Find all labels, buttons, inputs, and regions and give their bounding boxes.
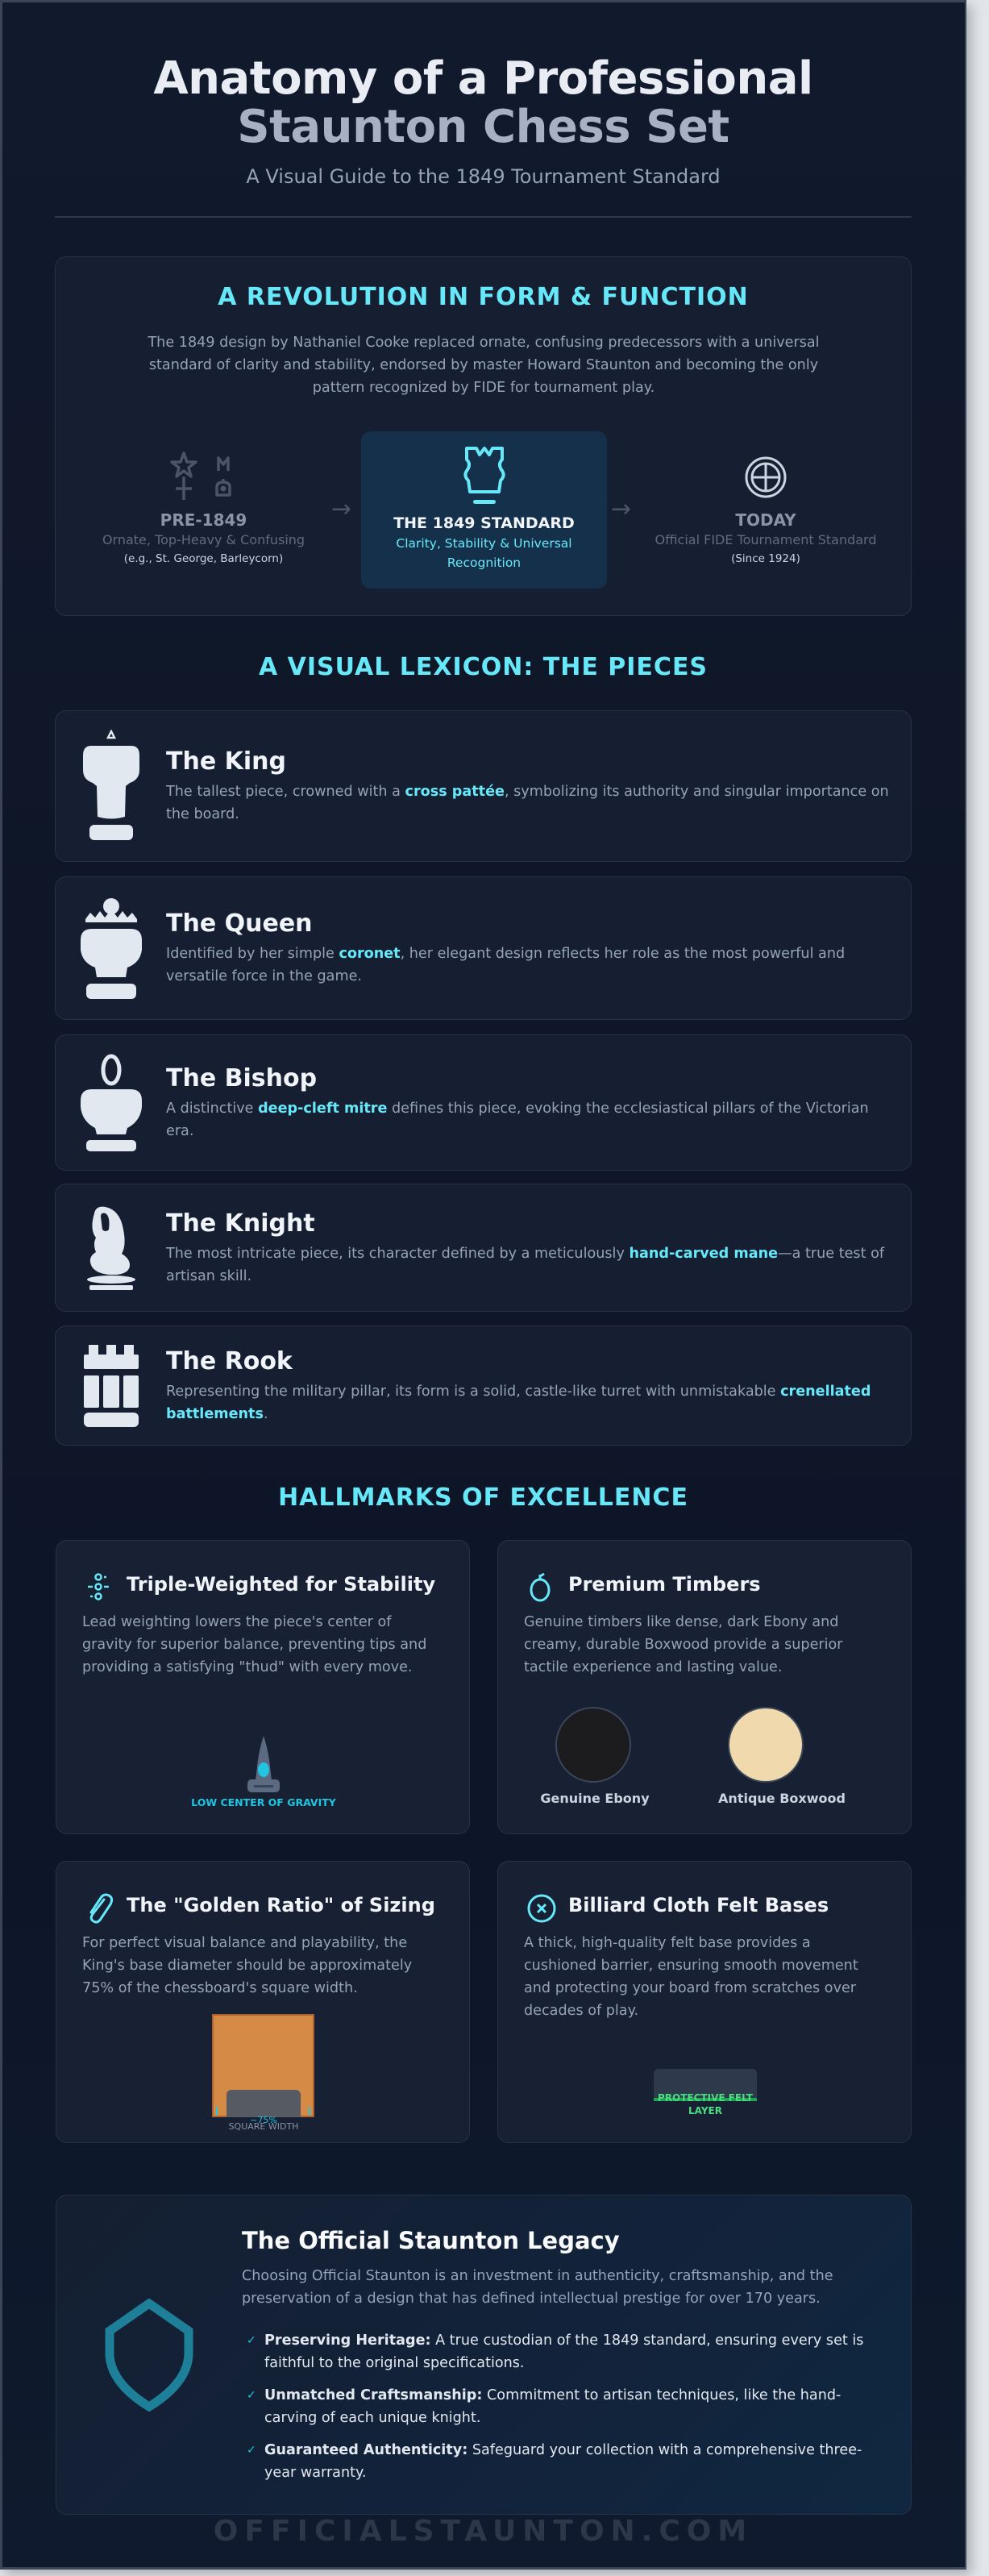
- card: felt bases: Billiard Cloth Felt Bases: [568, 1894, 829, 1916]
- timeline: today: (Since 1924): [731, 552, 800, 565]
- card: triple-weighted: Triple-Weighted for Stability: [127, 1573, 435, 1596]
- label: boxwood: Antique Boxwood: [718, 1791, 846, 1806]
- intro paragraph: The 1849 design by Nathaniel Cooke replaced ornate, confusing predecessors with a universal standard of clarity and stability, endorsed by master Howard Staunton and becoming the only pattern recognized by FIDE for tournament play.: [148, 335, 820, 396]
- icon: shield: [105, 2299, 193, 2412]
- timeline: today: [654, 456, 877, 565]
- subtitle: A Visual Guide to the 1849 Tournament Standard: [246, 165, 721, 188]
- card: queen: Identified by her simple coronet, her elegant design reflects her role as the most powerful and versatile force in the game.: [166, 946, 845, 984]
- graphic: square width: SQUARE WIDTH: [229, 2121, 298, 2132]
- panel: revolution: [55, 256, 912, 616]
- timeline: 1849 standard: THE 1849 STANDARD: [393, 514, 575, 532]
- icon: bishop: [81, 1055, 142, 1151]
- legacy paragraph: Choosing Official Staunton is an investment in authenticity, craftsmanship, and the preservation of a design that has defined intellectual prestige for over 170 years.: [242, 2268, 833, 2307]
- icon: rook: [84, 1345, 139, 1427]
- graphic: low center of gravity: [191, 1736, 336, 1808]
- card: golden ratio: The "Golden Ratio" of Sizing: [127, 1894, 435, 1916]
- title: Anatomy of a Professional: [153, 52, 813, 105]
- card: queen: The Queen: [166, 909, 313, 938]
- heading: lexicon: A VISUAL LEXICON: THE PIECES: [259, 653, 708, 681]
- timeline: today: TODAY: [735, 510, 796, 530]
- swatch: boxwood: [728, 1707, 804, 1783]
- timeline: 1849 standard: Clarity, Stability & Universal Recognition: [396, 536, 572, 570]
- card: king: The King: [166, 747, 286, 776]
- card: rook: [55, 1325, 912, 1446]
- timeline: pre-1849: (e.g., St. George, Barleycorn): [124, 552, 283, 565]
- card: king: The tallest piece, crowned with a cross pattée, symbolizing its authority and singular importance on the board.: [166, 784, 889, 822]
- card: premium timbers: Premium Timbers: [568, 1573, 761, 1596]
- card: bishop: A distinctive deep-cleft mitre defines this piece, evoking the ecclesiastical pillars of the Victorian era.: [166, 1100, 869, 1138]
- bullet: authenticity: ✓: [247, 2444, 256, 2457]
- icon: ornate pieces: [170, 452, 231, 500]
- card: premium timbers: [497, 1540, 912, 1834]
- label: ebony: Genuine Ebony: [540, 1791, 650, 1806]
- timeline: 1849 standard: [361, 431, 607, 589]
- card: triple-weighted: [56, 1540, 470, 1834]
- card: felt bases: A thick, high-quality felt base provides a cushioned barrier, ensuring smooth movement and protecting your board from scratches over decades of play.: [524, 1935, 858, 2019]
- panel: legacy: [56, 2195, 912, 2515]
- card: triple-weighted: Lead weighting lowers the piece's center of gravity for superior balance, preventing tips and providing a satisfying "thud" with every move.: [82, 1614, 426, 1675]
- graphic: felt layer: LAYER: [688, 2105, 722, 2116]
- icon: globe: [745, 456, 787, 498]
- icon: queen: [81, 898, 142, 999]
- graphic: low center of gravity: LOW CENTER OF GRAVITY: [191, 1796, 336, 1808]
- card: rook: Representing the military pillar, its form is a solid, castle-like turret with unmistakable crenellated battlements.: [166, 1384, 871, 1422]
- icon: circled x: [527, 1895, 556, 1922]
- card: knight: The Knight: [166, 1209, 315, 1237]
- card: knight: [55, 1184, 912, 1312]
- card: queen: [55, 876, 912, 1020]
- legacy title: The Official Staunton Legacy: [242, 2227, 620, 2254]
- title: Staunton Chess Set: [237, 101, 729, 153]
- graphic: square width: ~75%: [250, 2115, 277, 2125]
- card: bishop: The Bishop: [166, 1064, 317, 1092]
- graphic: felt layer: PROTECTIVE FELT: [658, 2092, 753, 2104]
- card: bishop: [55, 1034, 912, 1171]
- arrow 2: →: [611, 495, 631, 523]
- bullet: heritage: Preserving Heritage: A true custodian of the 1849 standard, ensuring every set is faithful to the original specifications.: [264, 2333, 863, 2371]
- bullet: authenticity: Guaranteed Authenticity: Safeguard your collection with a comprehensive three-year warranty.: [264, 2442, 862, 2481]
- card: premium timbers: Genuine timbers like dense, dark Ebony and creamy, durable Boxwood provide a superior tactile experience and lasting value.: [524, 1614, 843, 1675]
- bullet: craftsmanship: Unmatched Craftsmanship: Commitment to artisan techniques, like the hand-carving of each unique knight.: [264, 2387, 841, 2426]
- bullet: craftsmanship: ✓: [247, 2389, 256, 2402]
- footer: OFFICIALSTAUNTON.COM: [214, 2515, 753, 2548]
- card: knight: The most intricate piece, its character defined by a meticulously hand-carved mane—a true test of artisan skill.: [166, 1245, 884, 1284]
- graphic: felt layer: [654, 2069, 757, 2116]
- timeline: pre-1849: Ornate, Top-Heavy & Confusing: [102, 532, 305, 547]
- bullet list: [247, 2333, 863, 2481]
- card: felt bases: [497, 1861, 912, 2143]
- graphic: square width: [212, 2014, 314, 2132]
- heading: revolution: A REVOLUTION IN FORM & FUNCTION: [218, 283, 749, 311]
- icon: weights: [88, 1573, 109, 1600]
- bullet: heritage: ✓: [247, 2334, 256, 2347]
- heading: hallmarks: HALLMARKS OF EXCELLENCE: [278, 1484, 688, 1512]
- swatch: ebony: [555, 1707, 631, 1783]
- icon: timber: [530, 1572, 550, 1601]
- icon: standard piece: [463, 447, 505, 504]
- timeline: pre-1849: [102, 452, 305, 565]
- icon: paperclip: [89, 1893, 113, 1924]
- arrow 1: →: [331, 495, 351, 523]
- icon: king: [83, 730, 139, 840]
- title: [153, 52, 813, 153]
- label: pre-1849: PRE-1849: [160, 510, 247, 530]
- card: king: [55, 710, 912, 862]
- card: golden ratio: [56, 1861, 470, 2143]
- timeline: today: Official FIDE Tournament Standard: [654, 532, 877, 547]
- card: rook: The Rook: [166, 1346, 293, 1375]
- icon: knight: [87, 1206, 135, 1290]
- card: golden ratio: For perfect visual balance and playability, the King's base diameter should be approximately 75% of the chessboard's square width.: [82, 1935, 412, 1996]
